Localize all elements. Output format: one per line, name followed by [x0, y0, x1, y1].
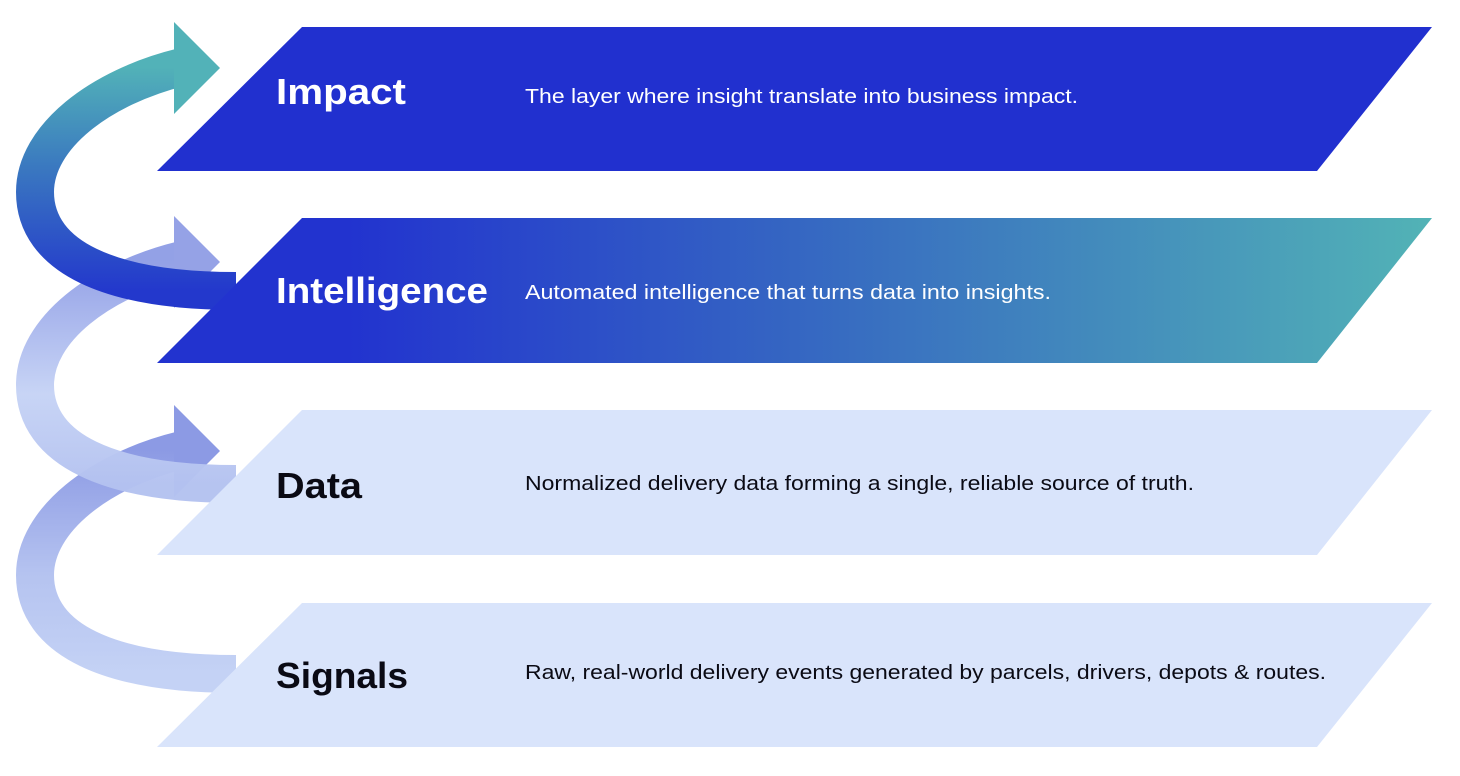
band: intelligence: Automated intelligence that turns data into insights. — [525, 282, 1051, 304]
band: impact — [157, 27, 1432, 171]
band: signals: Raw, real-world delivery events generated by parcels, drivers, depots & routes. — [525, 662, 1326, 684]
arrow: intelligence to impact — [35, 22, 236, 291]
band: data: Normalized delivery data forming a single, reliable source of truth. — [525, 473, 1194, 495]
arrow: data to intelligence — [35, 216, 236, 484]
band: impact: The layer where insight translate into business impact. — [525, 86, 1078, 108]
band: impact: Impact — [276, 71, 406, 112]
band: signals: Signals — [276, 655, 408, 696]
band: intelligence — [157, 218, 1432, 363]
band: data — [157, 410, 1432, 555]
band: signals — [157, 603, 1432, 747]
band: intelligence: Intelligence — [276, 270, 488, 311]
arrow: signals to data — [35, 405, 236, 674]
band: data: Data — [276, 465, 363, 506]
